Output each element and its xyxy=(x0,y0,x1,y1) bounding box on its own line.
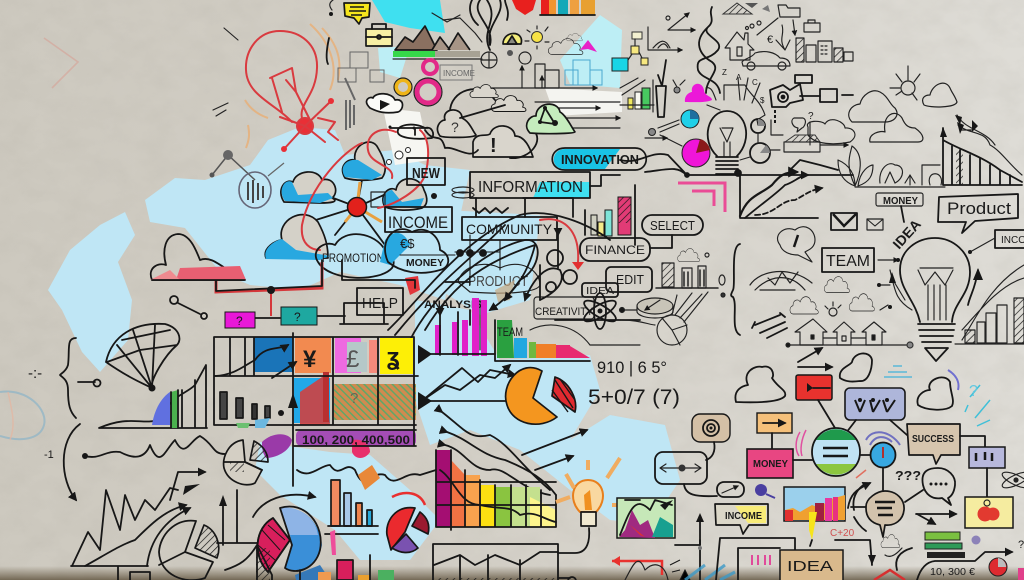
arrows across centre xyxy=(485,64,620,128)
decreasing lines with arrows above rainbow chart xyxy=(442,412,587,495)
label: PRODUCT xyxy=(458,264,540,302)
mountains with green band xyxy=(393,18,482,59)
small red pie xyxy=(989,539,1024,580)
city with cloud xyxy=(656,248,725,297)
centre right light bulb xyxy=(707,68,765,174)
label: money cloud: MONEY xyxy=(406,258,444,269)
team people box xyxy=(845,388,907,435)
grey office sketches xyxy=(338,52,384,130)
small red pie: ? xyxy=(1018,539,1024,551)
red and black connector lines to cloud xyxy=(216,260,345,318)
large blue and crimson pie xyxy=(253,495,330,580)
grid chart with coloured cells: ʓ xyxy=(387,344,400,371)
speech with dots xyxy=(905,468,955,505)
curly brace and marks far left: -1 xyxy=(44,449,54,461)
line chart over horizontal axis xyxy=(620,154,853,218)
houses on baseline xyxy=(786,319,913,348)
label: FINANCE xyxy=(580,238,650,261)
label: EDIT xyxy=(606,267,652,292)
label: TEAM xyxy=(822,248,898,272)
bottom coloured bars xyxy=(130,545,394,580)
label: SUCCESS speech xyxy=(907,424,985,464)
top right: arrows and triangles: € xyxy=(767,34,773,46)
small bar chart colours xyxy=(620,60,666,117)
hatched platform and speech icon xyxy=(784,111,855,152)
label: MONEY pink box: MONEY xyxy=(753,459,788,470)
centre right light bulb: C xyxy=(752,78,758,87)
colored rings xyxy=(394,60,442,106)
wrenches xyxy=(752,313,787,338)
curly brace and marks far left: -:- xyxy=(28,365,42,382)
buildings and briefcase xyxy=(796,20,853,62)
cloud cluster with question mark: ! xyxy=(490,135,497,157)
blue cloud right: ? xyxy=(969,383,978,400)
painted light blue splashes xyxy=(48,127,680,560)
small yellow and cyan boxes xyxy=(612,32,648,71)
label: money cloud: €$ xyxy=(400,236,415,251)
centre right light bulb: Z xyxy=(722,68,727,77)
orange arrow box xyxy=(757,413,792,448)
label: COMMUNITY xyxy=(462,198,573,240)
magenta shape and small clouds xyxy=(548,33,602,85)
label: INCOME: INCOME xyxy=(388,213,448,232)
cloud cluster with question mark xyxy=(425,84,537,158)
rainbow stepped area chart xyxy=(436,450,556,530)
plant and trees xyxy=(838,146,945,187)
colourful mini chart xyxy=(784,487,845,546)
teal question box xyxy=(281,307,317,325)
big light bulb: IDEA xyxy=(889,216,924,252)
label: TEAM: TEAM xyxy=(826,253,870,270)
label: CREATIVITY with atom xyxy=(534,293,619,329)
pill with arrow xyxy=(717,482,744,497)
magenta question box: ? xyxy=(236,314,243,328)
parachute xyxy=(106,324,179,392)
blue circle compass xyxy=(856,432,900,490)
magenta question box xyxy=(225,312,255,328)
magenta cloud and pies xyxy=(645,80,716,167)
magenta bars xyxy=(435,298,487,356)
team area chart xyxy=(418,320,640,364)
black scribble arrows over centre xyxy=(342,213,640,350)
centre right light bulb: $ xyxy=(760,96,765,105)
label: 10,300 euro: 10, 300 € xyxy=(930,567,975,578)
pink cloud left xyxy=(150,234,246,319)
arrow bottom of bulb region xyxy=(798,348,832,367)
bridge xyxy=(750,271,812,290)
label: INCOME xyxy=(385,207,452,232)
arrows and green bars xyxy=(881,514,980,558)
gear and cog box xyxy=(770,75,853,107)
briefcase xyxy=(366,24,392,46)
label: SUCCESS speech: SUCCESS xyxy=(912,433,954,445)
label: SELECT: SELECT xyxy=(650,219,695,233)
faint marks at far left xyxy=(0,38,78,440)
label: HELP xyxy=(340,288,403,324)
red box xyxy=(796,375,835,428)
curly brace and marks far left xyxy=(28,338,100,500)
small lilac box xyxy=(969,447,1005,497)
label: Product speech box: Product xyxy=(947,199,1011,218)
label: COMMUNITY: COMMUNITY xyxy=(466,221,553,237)
label: INFORMATION: INFORMATION xyxy=(478,179,583,196)
outline pie bottom left xyxy=(159,490,259,580)
boxed line chart with connector xyxy=(433,528,589,580)
red heart and bar strip xyxy=(512,0,595,15)
label: NEW: NEW xyxy=(412,165,441,182)
house and car xyxy=(725,32,790,70)
compass rounded box xyxy=(655,452,717,496)
small bar chart hatched xyxy=(297,465,436,555)
label: money cloud xyxy=(380,229,448,295)
question marks: ??? xyxy=(895,468,921,483)
label: MONEY pink box xyxy=(747,449,813,478)
DNA spiral and top clusters xyxy=(329,0,508,68)
long curly brace xyxy=(731,244,740,335)
label: IDEA tan box: IDEA xyxy=(787,558,833,575)
grid chart with coloured cells xyxy=(214,333,418,486)
top right: arrows and triangles xyxy=(648,3,800,50)
label: INCOME speech yellow xyxy=(715,504,768,534)
handwritten numbers: 910 | 6 5° xyxy=(597,358,667,377)
white play cloud and thought bubbles xyxy=(367,94,433,164)
red thin curve around network xyxy=(302,130,428,250)
mini line chart square xyxy=(617,498,704,580)
orange pac-man pie xyxy=(506,368,576,424)
zigzag growth chart xyxy=(71,472,205,580)
mail icons xyxy=(831,213,883,230)
rising area sketch xyxy=(99,365,207,428)
small coloured bar chart by finance xyxy=(540,185,635,270)
apple box xyxy=(965,497,1013,528)
tan speech with lines xyxy=(848,483,904,537)
red arrow bottom xyxy=(612,556,735,580)
grid chart with coloured cells: ? xyxy=(350,390,358,407)
pale cyan and white patches xyxy=(378,15,622,165)
hatched platform and speech icon: ? xyxy=(808,111,814,122)
team area chart: TEAM xyxy=(497,325,523,339)
grid chart with coloured cells: £ xyxy=(346,346,359,373)
line graph arrows and triangle connector xyxy=(418,365,515,410)
label: 10,300 euro xyxy=(917,552,1012,580)
label: INFORMATION xyxy=(470,172,620,198)
label: INNOVATION xyxy=(552,148,646,170)
orange light bulb xyxy=(556,458,622,526)
label: MONEY tag xyxy=(876,193,923,222)
green and blue round badge xyxy=(796,428,860,476)
label: HELP: HELP xyxy=(362,295,398,312)
label: PROMOTION cloud xyxy=(316,234,394,278)
blue cloud xyxy=(735,366,785,402)
label: IDEA small xyxy=(582,283,618,297)
arrow fan and disc pies xyxy=(620,292,708,345)
teal question box: ? xyxy=(294,310,301,324)
label: INCO box xyxy=(968,230,1024,254)
sun and half sun xyxy=(503,26,549,64)
grid chart with coloured cells: ¥ xyxy=(303,346,317,373)
red roof outline bottom xyxy=(874,548,912,580)
line pies beside bulb xyxy=(740,110,783,163)
label: ANALYSIS: ANALYSIS xyxy=(424,299,482,311)
atom right xyxy=(1000,469,1024,491)
handwritten numbers: 5+0/7 (7) xyxy=(588,386,680,409)
cyan paint patches at the top xyxy=(372,0,590,198)
label: INCOME speech yellow: INCOME xyxy=(725,511,762,522)
camera box xyxy=(692,414,730,460)
label: FINANCE: FINANCE xyxy=(585,243,645,257)
label: CREATIVITY with atom: CREATIVITY xyxy=(535,306,594,318)
label: NEW xyxy=(407,158,474,199)
small clouds under bridge xyxy=(790,277,875,316)
label: IDEA small: IDEA xyxy=(586,286,614,297)
blue dash marks xyxy=(884,366,912,377)
income tag grey: INCOME xyxy=(443,69,475,78)
clouds and sun upper right xyxy=(849,66,957,142)
label: MONEY tag: MONEY xyxy=(883,195,918,207)
small blue cloud xyxy=(840,353,872,382)
cloud cluster with question mark: ? xyxy=(451,119,459,135)
decreasing bar chart right xyxy=(940,115,1022,185)
label: IDEA tan box xyxy=(780,550,843,580)
purple blot and C+20: C+20 xyxy=(830,528,855,539)
label: EDIT: EDIT xyxy=(616,272,644,287)
layered boxes and IDEA label xyxy=(716,538,876,580)
red pie with purple slice xyxy=(387,493,429,553)
wave line with pie xyxy=(85,436,268,485)
grid chart with coloured cells: 100, 200, 400,500 xyxy=(302,433,410,447)
idea network: clouds around red hub xyxy=(265,142,427,260)
label: PROMOTION cloud: PROMOTION xyxy=(322,251,384,265)
label: PRODUCT: PRODUCT xyxy=(468,273,528,290)
red light bulb xyxy=(213,24,339,152)
DNA wiggle xyxy=(698,7,720,93)
centre right light bulb: A xyxy=(736,73,742,82)
handwritten numbers xyxy=(588,358,680,409)
pink painted corner lines xyxy=(678,183,725,212)
right bars chart xyxy=(955,265,1024,344)
grey network with circle xyxy=(210,150,284,208)
green cloud with nodes xyxy=(527,104,575,134)
purple blot and C+20 xyxy=(755,484,855,539)
big light bulb xyxy=(877,216,983,361)
income tag grey xyxy=(440,65,475,80)
label: INNOVATION: INNOVATION xyxy=(561,152,639,167)
label: SELECT xyxy=(642,215,703,248)
blue cloud right xyxy=(917,370,990,426)
yellow speech note xyxy=(344,3,370,24)
label: Product speech box xyxy=(938,194,1018,233)
speech cloud with i xyxy=(778,227,815,262)
